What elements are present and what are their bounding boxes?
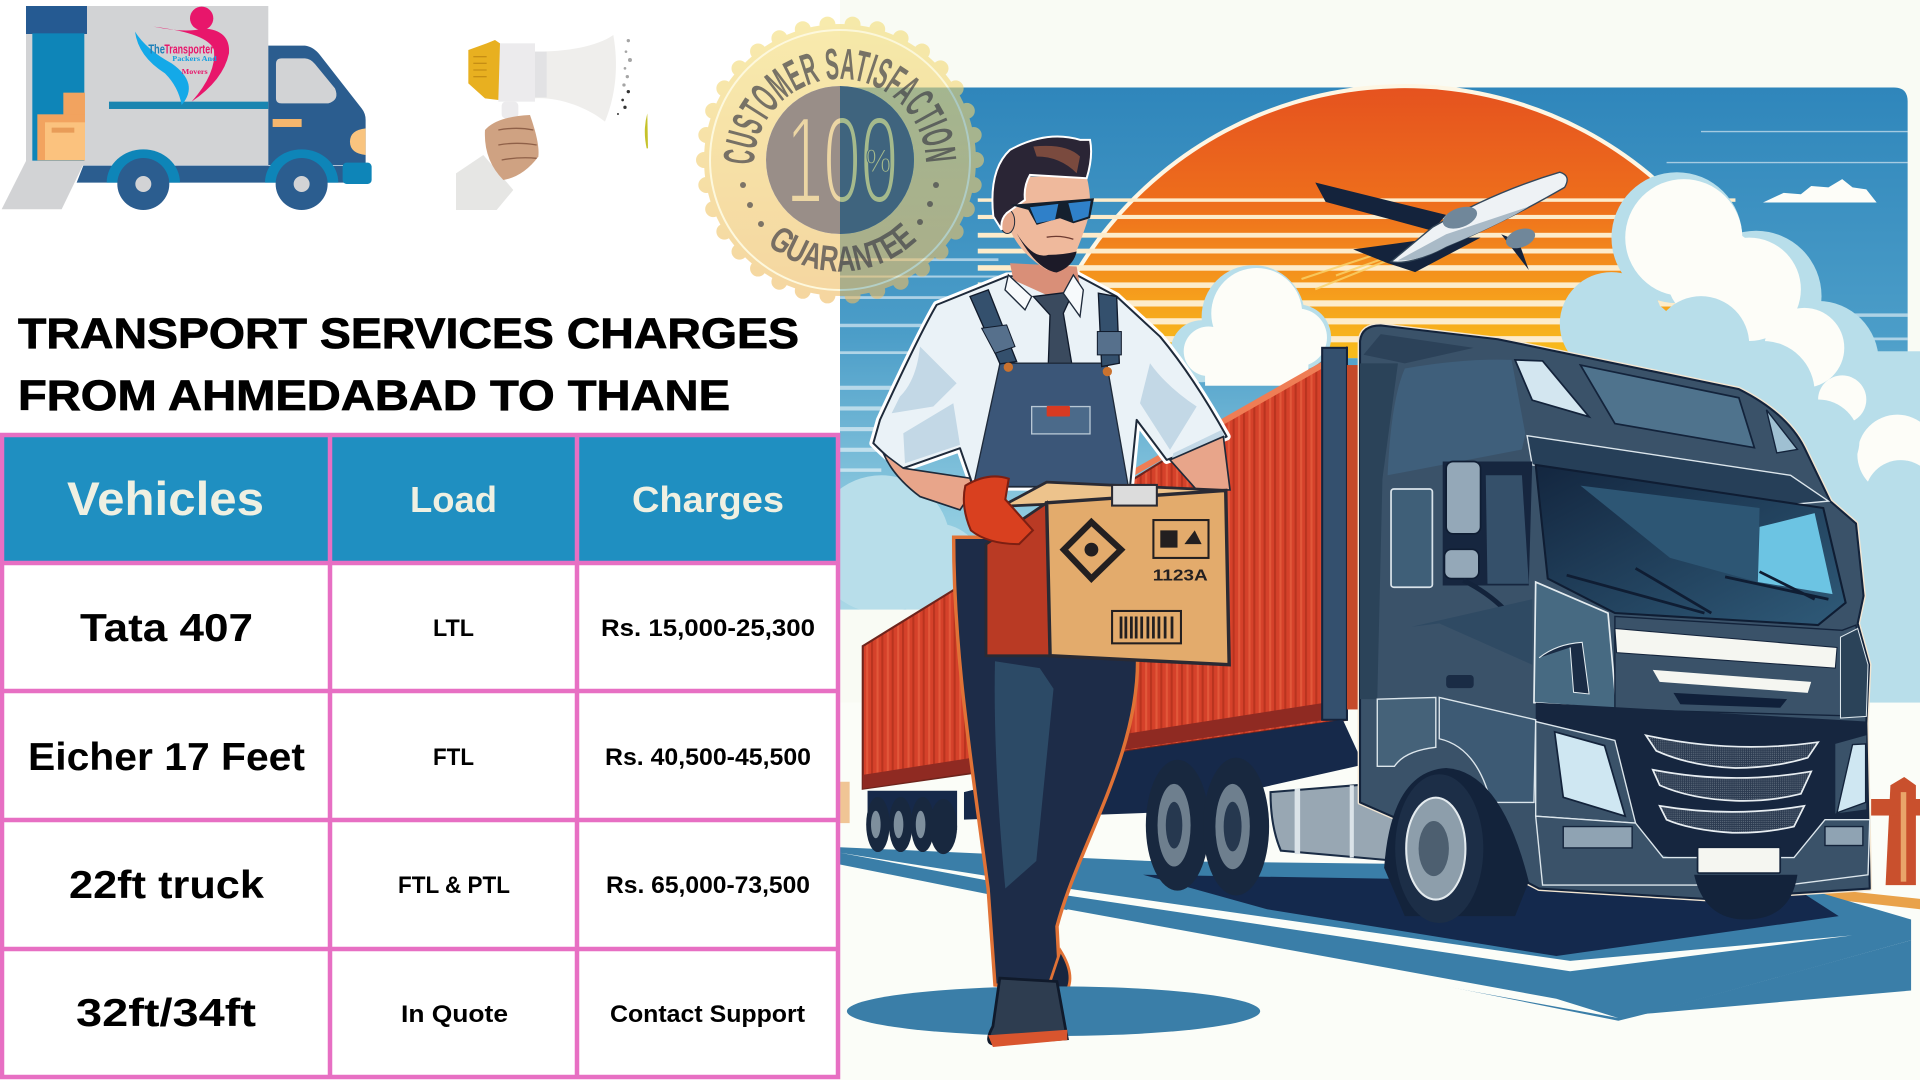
illustration panel: man and truck scene (812, 0, 1920, 1080)
table row: Eicher 17 Feet (28, 736, 811, 779)
table row: Tata 407: Tata 407 (80, 607, 253, 650)
table row: 32ft/34ft (76, 992, 805, 1035)
badge: customer satisfaction seal (696, 16, 984, 304)
logo mark: Packers And (172, 54, 217, 63)
truck shadow (1143, 875, 1839, 956)
chassis and rear wheels (866, 720, 1398, 895)
small far cloud (1763, 179, 1877, 203)
table row: Eicher 17 Feet: Eicher 17 Feet (28, 736, 305, 779)
ground shadow (847, 986, 1260, 1036)
logo mark: Movers (182, 67, 208, 76)
badge: customer satisfaction seal: GUARANTEE (771, 222, 917, 272)
table header row (2, 436, 838, 563)
badge: customer satisfaction seal: 100 (786, 92, 898, 230)
clouds (812, 172, 1920, 709)
cardboard box: 1123A (1153, 568, 1208, 585)
badge: customer satisfaction seal: % (866, 143, 891, 179)
table row: 32ft/34ft: Contact Support (610, 1001, 805, 1028)
table row: Eicher 17 Feet: Rs. 40,500-45,500 (605, 744, 811, 771)
table row: 32ft/34ft: 32ft/34ft (76, 992, 256, 1035)
table row: Eicher 17 Feet: FTL (433, 744, 474, 771)
plane (1301, 172, 1567, 289)
sky panel (840, 88, 1908, 610)
badge: customer satisfaction seal: CUSTOMER SATISFACTION (724, 48, 956, 164)
cardboard box (986, 482, 1229, 665)
trailer container (863, 348, 1361, 789)
logo truck icon (2, 6, 372, 210)
worker shoe (988, 978, 1067, 1047)
logo mark: The (148, 42, 165, 56)
table row: Tata 407: LTL (433, 615, 474, 642)
table header row: Vehicles (67, 472, 264, 525)
ground with road (840, 702, 1920, 1021)
truck cab (1360, 325, 1870, 899)
worker upper body (873, 137, 1230, 510)
table row: 22ft truck: 22ft truck (69, 864, 264, 907)
sun with stripes (978, 84, 1736, 358)
table header row: Load (410, 479, 497, 520)
worker legs (954, 537, 1138, 995)
title: FROM AHMEDABAD TO THANE (18, 372, 730, 420)
table row: 22ft truck: FTL & PTL (398, 872, 510, 899)
icon: megaphone in hand (456, 35, 648, 210)
table row: 22ft truck: Rs. 65,000-73,500 (606, 872, 810, 899)
table row: 22ft truck (69, 864, 810, 907)
pricing table (2, 435, 838, 1077)
red glove (964, 476, 1033, 544)
table row: 32ft/34ft: In Quote (401, 1001, 508, 1028)
sign post (1871, 777, 1920, 885)
front wheels (1384, 768, 1797, 923)
table row: Tata 407 (80, 607, 815, 650)
logo mark (135, 7, 229, 105)
title: TRANSPORT SERVICES CHARGES (18, 310, 799, 358)
table header row: Charges (632, 479, 784, 520)
logo mark: Transporter (164, 42, 214, 56)
title (18, 310, 799, 420)
table row: Tata 407: Rs. 15,000-25,300 (601, 615, 815, 642)
